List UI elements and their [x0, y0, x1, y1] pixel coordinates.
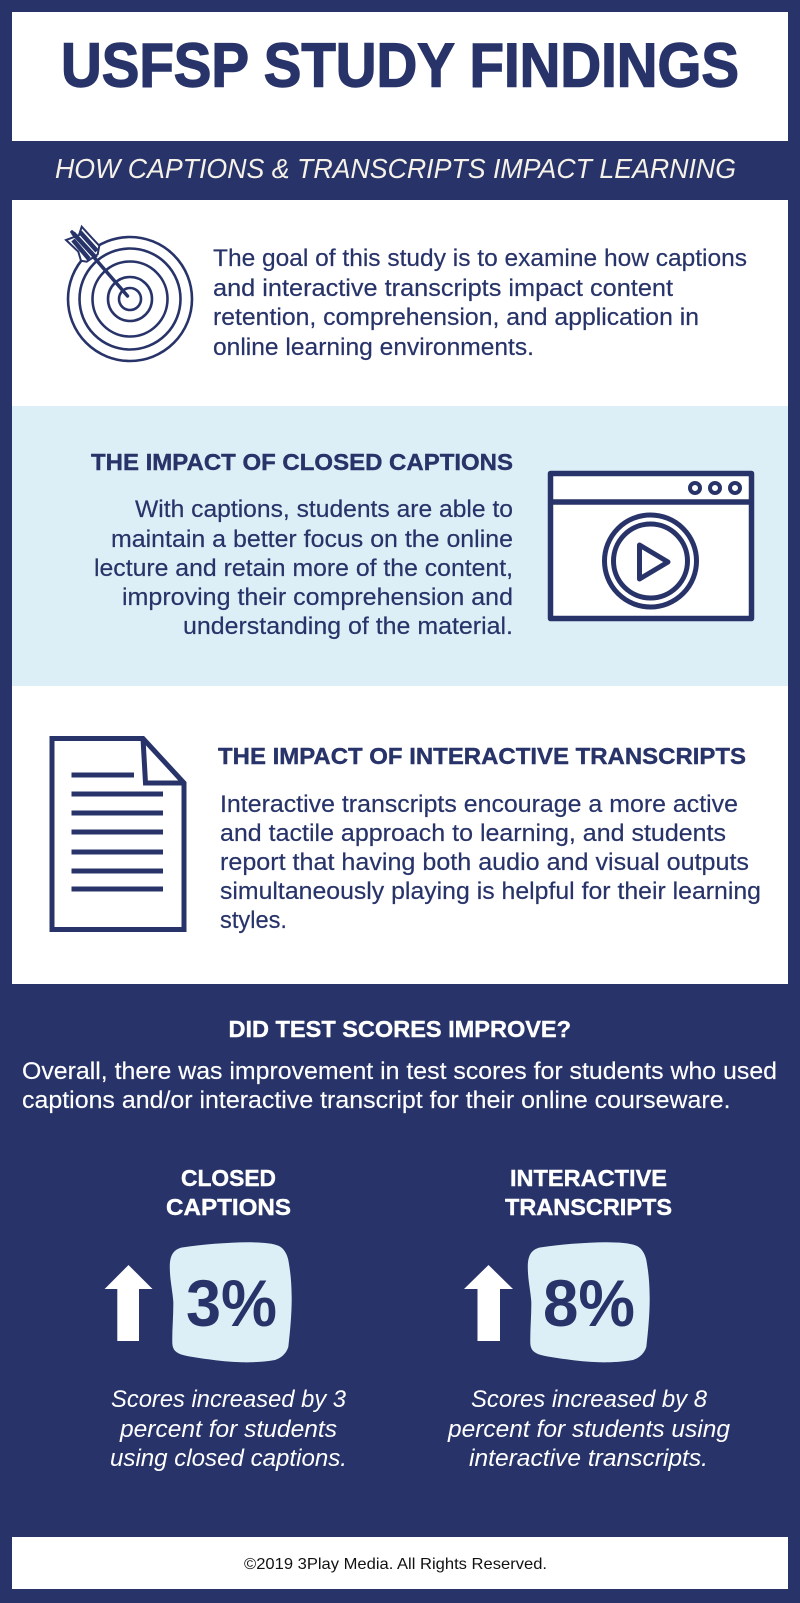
- panel: footer: [12, 1537, 788, 1589]
- overall text: captions and/or interactive transcript for their online courseware.: [22, 1087, 730, 1114]
- stat heading: closed captions: [166, 1165, 291, 1220]
- goal text: retention, comprehension, and application in: [213, 304, 699, 331]
- goal text: The goal of this study is to examine how captions: [213, 245, 747, 272]
- interactive transcripts text: report that having both audio and visual outputs: [220, 849, 749, 876]
- overall text: Overall, there was improvement in test scores for students who used: [22, 1058, 777, 1085]
- goal text: [213, 245, 747, 361]
- icon: document: [52, 738, 184, 930]
- stat caption: closed captions: [110, 1386, 347, 1472]
- closed captions text: [94, 496, 513, 640]
- icon: video player: [550, 474, 752, 618]
- interactive transcripts text: [220, 791, 761, 934]
- stat heading: interactive transcripts: [505, 1165, 672, 1220]
- panel: study goal: [12, 200, 788, 406]
- panel: title: [12, 12, 788, 141]
- stat caption: closed captions: percent for students: [119, 1416, 337, 1443]
- goal text: online learning environments.: [213, 334, 534, 361]
- icon: target with arrow: [66, 227, 192, 361]
- title: USFSP STUDY FINDINGS: [61, 32, 739, 100]
- heading: interactive transcripts: THE IMPACT OF INTERACTIVE TRANSCRIPTS: [218, 743, 746, 769]
- stat heading: closed captions: CAPTIONS: [166, 1194, 291, 1220]
- panel: closed captions: [12, 406, 788, 686]
- heading: did test scores improve: DID TEST SCORES IMPROVE?: [228, 1016, 571, 1042]
- icon: up arrow: [105, 1265, 152, 1341]
- goal text: and interactive transcripts impact content: [213, 275, 673, 302]
- stat: closed captions: [105, 1165, 347, 1472]
- stat caption: interactive transcripts: Scores increased by 8: [471, 1386, 707, 1413]
- closed captions text: understanding of the material.: [183, 613, 513, 640]
- interactive transcripts text: styles.: [220, 907, 287, 934]
- badge: 8 percent: 8%: [543, 1266, 635, 1340]
- heading: closed captions: THE IMPACT OF CLOSED CAPTIONS: [91, 449, 513, 475]
- interactive transcripts text: simultaneously playing is helpful for their learning: [220, 878, 761, 905]
- closed captions text: maintain a better focus on the online: [111, 526, 513, 553]
- icon: up arrow: [464, 1265, 513, 1341]
- badge: 3 percent: [170, 1242, 292, 1362]
- overall text: [22, 1058, 777, 1114]
- stat caption: interactive transcripts: percent for students using: [447, 1416, 730, 1443]
- badge: 3 percent: 3%: [186, 1266, 277, 1340]
- stat: interactive transcripts: [447, 1165, 730, 1472]
- stat caption: closed captions: using closed captions.: [110, 1445, 347, 1472]
- closed captions text: improving their comprehension and: [122, 584, 513, 611]
- copyright: ©2019 3Play Media. All Rights Reserved.: [244, 1556, 547, 1573]
- subtitle: HOW CAPTIONS & TRANSCRIPTS IMPACT LEARNING: [55, 153, 736, 184]
- interactive transcripts text: Interactive transcripts encourage a more active: [220, 791, 738, 818]
- stat heading: closed captions: CLOSED: [181, 1165, 276, 1191]
- stat heading: interactive transcripts: INTERACTIVE: [510, 1165, 667, 1191]
- panel: interactive transcripts: [12, 686, 788, 984]
- closed captions text: lecture and retain more of the content,: [94, 555, 513, 582]
- closed captions text: With captions, students are able to: [135, 496, 513, 523]
- stat caption: interactive transcripts: [447, 1386, 730, 1472]
- interactive transcripts text: and tactile approach to learning, and students: [220, 820, 726, 847]
- stat heading: interactive transcripts: TRANSCRIPTS: [505, 1194, 672, 1220]
- badge: 8 percent: [528, 1242, 650, 1362]
- stat caption: interactive transcripts: interactive transcripts.: [469, 1445, 708, 1472]
- stat caption: closed captions: Scores increased by 3: [111, 1386, 346, 1413]
